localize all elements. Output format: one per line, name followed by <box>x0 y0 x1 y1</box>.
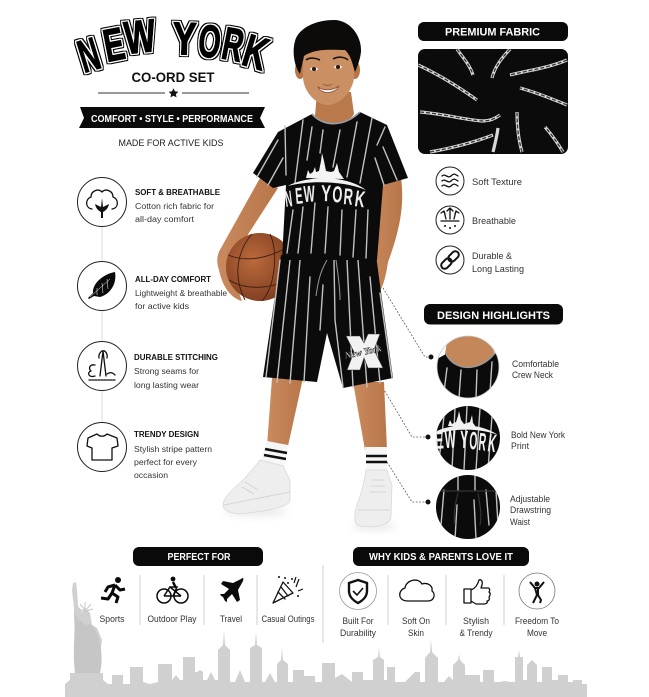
benefit: stylish and trendy: Stylish <box>463 616 489 626</box>
feature: soft and breathable <box>78 178 220 226</box>
feature: durable stitching <box>78 342 218 390</box>
icon: cotton <box>78 178 126 226</box>
use: travel <box>220 578 243 624</box>
icon: bicycle <box>157 577 188 603</box>
icon: thumbs up <box>464 580 490 604</box>
use: outdoor play: Outdoor Play <box>148 614 197 624</box>
tee print: new york: W <box>303 180 316 207</box>
tee print: skyline <box>288 153 366 190</box>
subtitle: co-ord set: CO-ORD SET <box>132 70 215 85</box>
fabric feature: breathable <box>436 206 516 234</box>
icon: jumping figure <box>519 573 555 609</box>
feature: trendy design <box>78 422 212 480</box>
benefit: built for durability: Built For <box>342 616 374 626</box>
right arm <box>368 178 402 291</box>
premium fabric header <box>418 22 568 41</box>
tee print: new york: O <box>332 181 343 207</box>
tee print: new york: K <box>353 187 367 213</box>
title: New York: E <box>99 19 129 72</box>
feature: trendy design: perfect for every <box>134 457 198 467</box>
feature: all-day comfort <box>78 262 227 311</box>
dividers <box>140 565 504 643</box>
title: New York: K <box>237 25 274 81</box>
icon: needle and thread <box>78 342 126 390</box>
fabric feature: soft texture <box>436 167 522 195</box>
neck <box>315 92 354 125</box>
feature: trendy design: occasion <box>134 470 168 480</box>
icon: chain link <box>436 246 464 274</box>
highlight: new york print: O <box>469 428 478 456</box>
feature: all-day comfort: for active kids <box>135 301 189 311</box>
icon: airflow arrows <box>436 206 464 234</box>
feature: soft and breathable: SOFT & BREATHABLE <box>135 187 220 197</box>
feature: trendy design: TRENDY DESIGN <box>134 429 199 439</box>
face details <box>306 57 348 93</box>
icon: shield <box>340 572 376 610</box>
model: boy with basketball <box>217 20 408 529</box>
perfect for header <box>133 547 263 566</box>
ribbon: comfort style performance: COMFORT • STYLE • PERFORMANCE <box>91 114 253 125</box>
highlight: crew neck <box>428 330 559 398</box>
fabric feature: durable <box>436 246 524 274</box>
skyline illustration <box>65 582 587 697</box>
feature: soft and breathable: all-day comfort <box>135 214 195 224</box>
icon: cloud <box>400 580 434 601</box>
legs <box>267 378 387 450</box>
benefit: built for durability <box>340 572 377 638</box>
basketball <box>226 233 294 301</box>
use: sports <box>100 577 125 624</box>
feature: soft and breathable: Cotton rich fabric for <box>135 201 214 211</box>
highlight: new york print <box>426 406 566 470</box>
tee print: new york: R <box>343 183 354 210</box>
highlight: new york print: K <box>486 430 498 459</box>
highlight: crew neck: Crew Neck <box>512 370 554 380</box>
perfect for header: PERFECT FOR <box>168 552 231 563</box>
leader lines <box>383 288 431 502</box>
feature: durable stitching: Strong seams for <box>134 366 199 376</box>
use: travel: Travel <box>220 614 242 624</box>
design highlights header: DESIGN HIGHLIGHTS <box>437 310 550 322</box>
icon: airplane <box>220 578 243 602</box>
feature: all-day comfort: ALL-DAY COMFORT <box>135 274 212 284</box>
shorts <box>263 255 393 388</box>
icon: waves <box>436 167 464 195</box>
fabric swatch <box>418 49 568 154</box>
icon: t-shirt <box>78 422 126 472</box>
title: New York: N <box>72 29 106 83</box>
benefit: stylish and trendy <box>460 580 493 638</box>
tee print: new york: Y <box>321 181 331 207</box>
highlight: drawstring waist: Drawstring <box>510 505 551 515</box>
title: New York: O <box>196 15 223 69</box>
highlight: drawstring waist: Waist <box>510 517 531 527</box>
icon: party popper <box>273 576 303 603</box>
icon: feather <box>78 262 126 310</box>
highlight: drawstring waist <box>426 475 551 539</box>
fabric feature: durable: Long Lasting <box>472 264 524 274</box>
fabric feature: durable: Durable & <box>472 251 512 261</box>
highlight: new york print: Print <box>511 441 530 451</box>
benefit: freedom to move <box>515 573 559 638</box>
benefit: soft on skin: Skin <box>408 628 424 638</box>
highlight: crew neck: Comfortable <box>512 359 559 369</box>
design highlights header <box>424 304 563 324</box>
highlight: new york print: Y <box>460 426 468 455</box>
why kids and parents love it header: WHY KIDS & PARENTS LOVE IT <box>369 552 513 563</box>
use: casual outings <box>262 576 315 624</box>
floor shadow <box>224 509 396 529</box>
feature: durable stitching: DURABLE STITCHING <box>134 352 218 362</box>
icon: runner <box>101 577 125 603</box>
premium fabric header: PREMIUM FABRIC <box>445 26 540 38</box>
highlight: new york print: Bold New York <box>511 430 566 440</box>
benefit: freedom to move: Move <box>527 628 547 638</box>
use: sports: Sports <box>100 614 125 624</box>
tee print: new york: N <box>283 185 294 212</box>
use: outdoor play <box>148 577 197 624</box>
benefit: freedom to move: Freedom To <box>515 616 559 626</box>
shoes <box>223 460 392 527</box>
title: New York <box>72 11 274 83</box>
title: New York: Y <box>172 13 197 65</box>
fabric feature: breathable: Breathable <box>472 216 516 226</box>
feature: trendy design: Stylish stripe pattern <box>134 444 212 454</box>
tee print: new york: E <box>294 183 304 209</box>
highlight: new york print: R <box>477 429 487 457</box>
star divider <box>98 88 249 97</box>
feature: all-day comfort: Lightweight & breathable <box>135 288 227 298</box>
shorts print: New York <box>343 344 383 362</box>
title: New York: W <box>122 11 158 64</box>
title: New York: R <box>218 18 248 73</box>
why kids and parents love it header <box>353 547 529 566</box>
connector lines <box>101 227 103 422</box>
socks <box>260 441 387 472</box>
highlight: new york print: E <box>434 427 445 455</box>
benefit: built for durability: Durability <box>340 628 377 638</box>
head <box>294 20 361 105</box>
fabric feature: soft texture: Soft Texture <box>472 177 522 187</box>
ribbon: comfort style performance <box>79 107 265 128</box>
left arm <box>217 178 278 301</box>
tee print: new york <box>283 180 367 213</box>
tagline: MADE FOR ACTIVE KIDS <box>118 137 224 148</box>
use: casual outings: Casual Outings <box>262 614 315 624</box>
t-shirt <box>253 112 408 260</box>
highlight: new york print: W <box>444 426 457 454</box>
feature: durable stitching: long lasting wear <box>134 380 199 390</box>
benefit: stylish and trendy: & Trendy <box>460 628 493 638</box>
benefit: soft on skin <box>400 580 434 638</box>
highlight: drawstring waist: Adjustable <box>510 494 550 504</box>
benefit: soft on skin: Soft On <box>402 616 430 626</box>
